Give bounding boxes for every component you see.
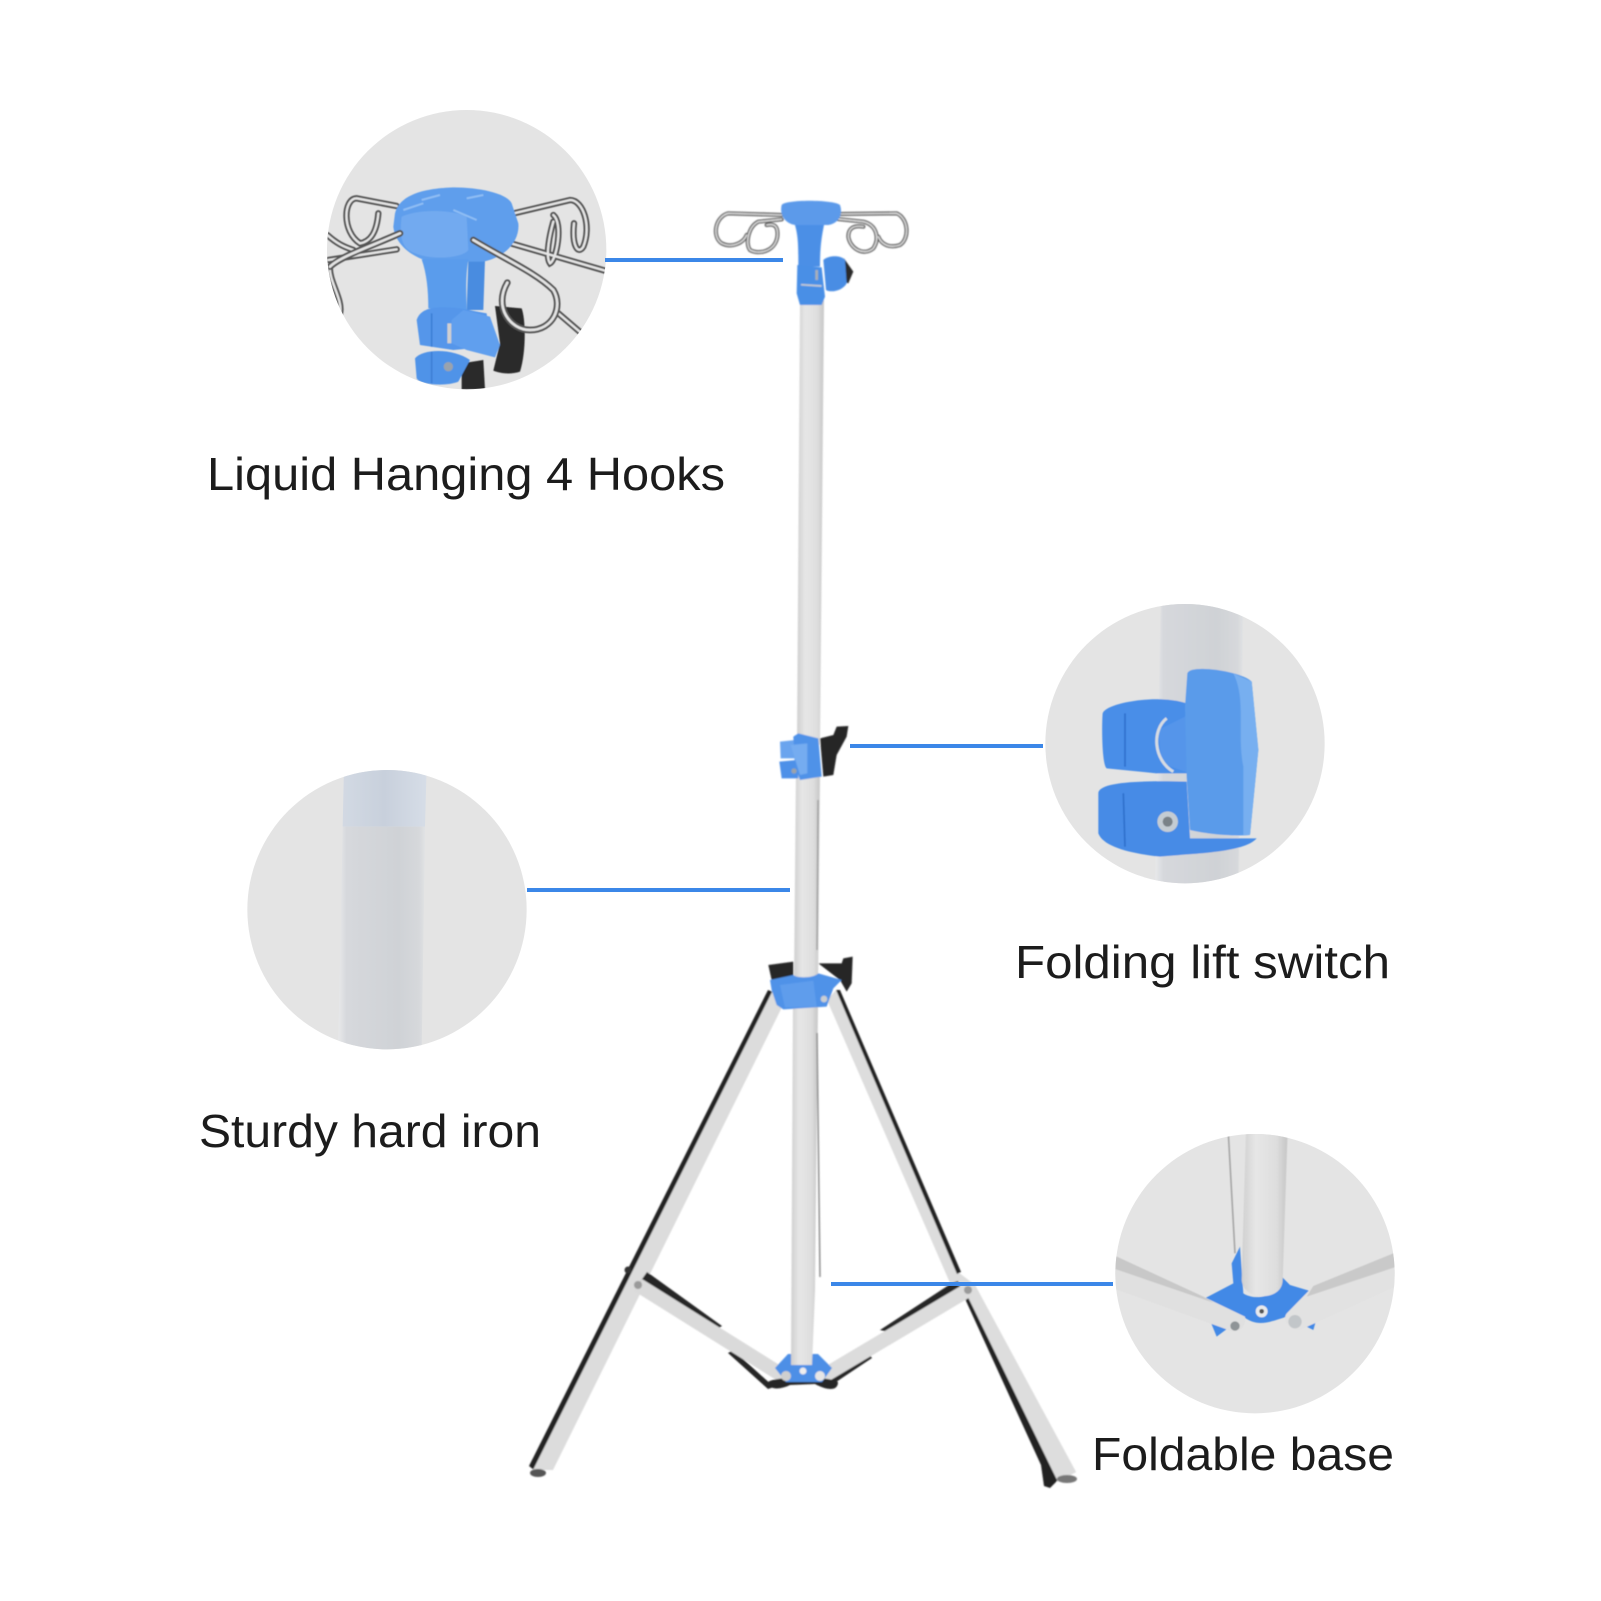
tripod IV stand [529, 201, 1077, 1488]
icon: base hub screws [634, 1281, 972, 1381]
icon: left leg [529, 990, 788, 1477]
icon: right strut [1285, 1252, 1397, 1330]
label: base: Foldable base [1092, 1428, 1394, 1480]
icon: brace wire [817, 1033, 820, 1277]
icon: tube blue band [343, 767, 427, 827]
icon: front hook over head [330, 233, 557, 330]
icon: black knob [462, 306, 525, 389]
label: iron: Sturdy hard iron [199, 1105, 541, 1157]
icon: centre tube [1242, 1130, 1288, 1296]
icon: top hooks and head [716, 201, 907, 305]
panel: iron tube detail circle [247, 767, 527, 1053]
connector: hooks [605, 258, 783, 262]
connector: iron tube [527, 888, 790, 892]
label: hooks: Liquid Hanging 4 Hooks [207, 448, 725, 500]
icon: thin brace wire [1228, 1133, 1235, 1253]
icon: lower centre pole [791, 1000, 818, 1365]
label: lift switch: Folding lift switch [1015, 936, 1390, 988]
icon: left strut [634, 1272, 789, 1389]
icon: blue switch [1098, 669, 1258, 857]
icon: base hub [768, 1354, 838, 1389]
panel: hooks detail circle [327, 110, 606, 389]
icon: upper pole [797, 300, 824, 745]
icon: tube body [338, 827, 425, 1053]
icon: blue hook head [393, 187, 518, 385]
panel: lift switch detail circle [1045, 600, 1325, 887]
icon: steel hooks [327, 198, 605, 333]
icon: middle clamp [779, 726, 848, 780]
icon: right leg [827, 990, 1077, 1488]
icon: blue base hub [1202, 1247, 1323, 1337]
icon: right strut [816, 1281, 972, 1384]
icon: left strut [1113, 1255, 1245, 1331]
connector: foldable base [831, 1282, 1113, 1286]
icon: pole segment [1155, 600, 1243, 887]
panel: foldable base detail circle [1113, 1130, 1397, 1413]
icon: base clamp [768, 957, 853, 1009]
icon: middle pole [794, 770, 820, 985]
connector: lift switch [850, 744, 1043, 748]
